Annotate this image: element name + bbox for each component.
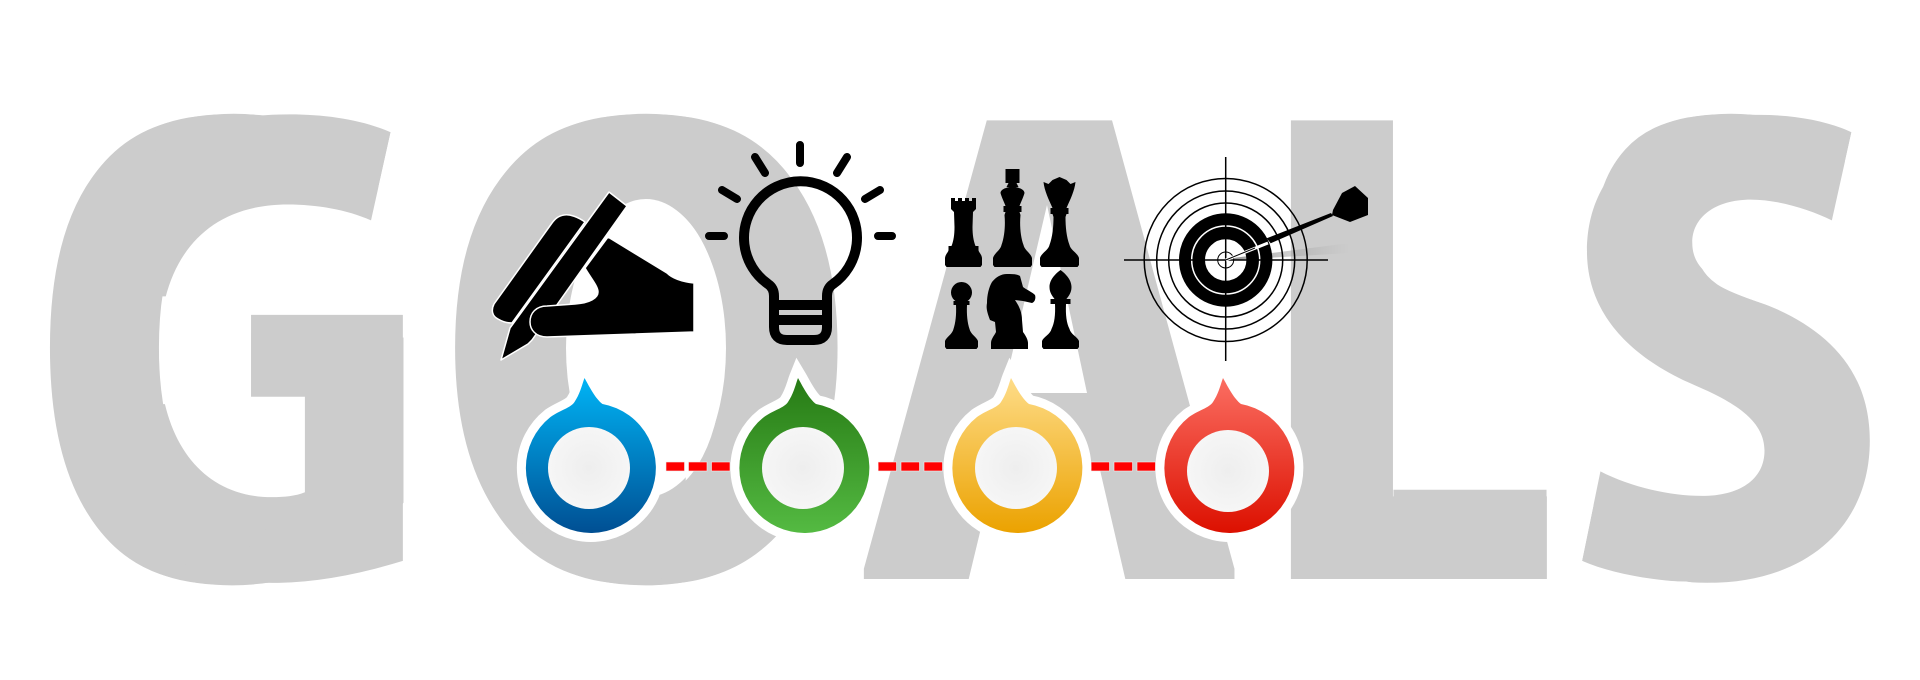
crosshair (1124, 157, 1328, 361)
icon: chess pieces (945, 169, 1079, 349)
connector: dashes 3 (1091, 462, 1156, 471)
icon: target with dart (1124, 157, 1368, 361)
knight (987, 274, 1035, 349)
bulb outline (744, 181, 857, 340)
light rays (709, 145, 892, 236)
icon: light bulb (709, 145, 892, 340)
marker: green drop (739, 378, 869, 533)
marker: red drop (1164, 378, 1294, 533)
connector: dashes 2 (878, 462, 942, 471)
dart (1226, 186, 1368, 260)
marker: yellow drop (952, 378, 1082, 533)
queen (1040, 177, 1079, 267)
rook (945, 198, 982, 267)
motion streak (1233, 243, 1350, 260)
king (993, 169, 1032, 267)
pen (501, 192, 627, 360)
icon: hand writing with pen (492, 192, 694, 360)
connector: dashes 1 (666, 462, 730, 471)
hand (530, 237, 694, 337)
finger (492, 215, 585, 323)
bulb base bars (774, 305, 827, 320)
bishop (1042, 270, 1079, 349)
marker: blue drop (526, 378, 656, 533)
pawn (945, 282, 978, 349)
target rings (1144, 178, 1307, 342)
